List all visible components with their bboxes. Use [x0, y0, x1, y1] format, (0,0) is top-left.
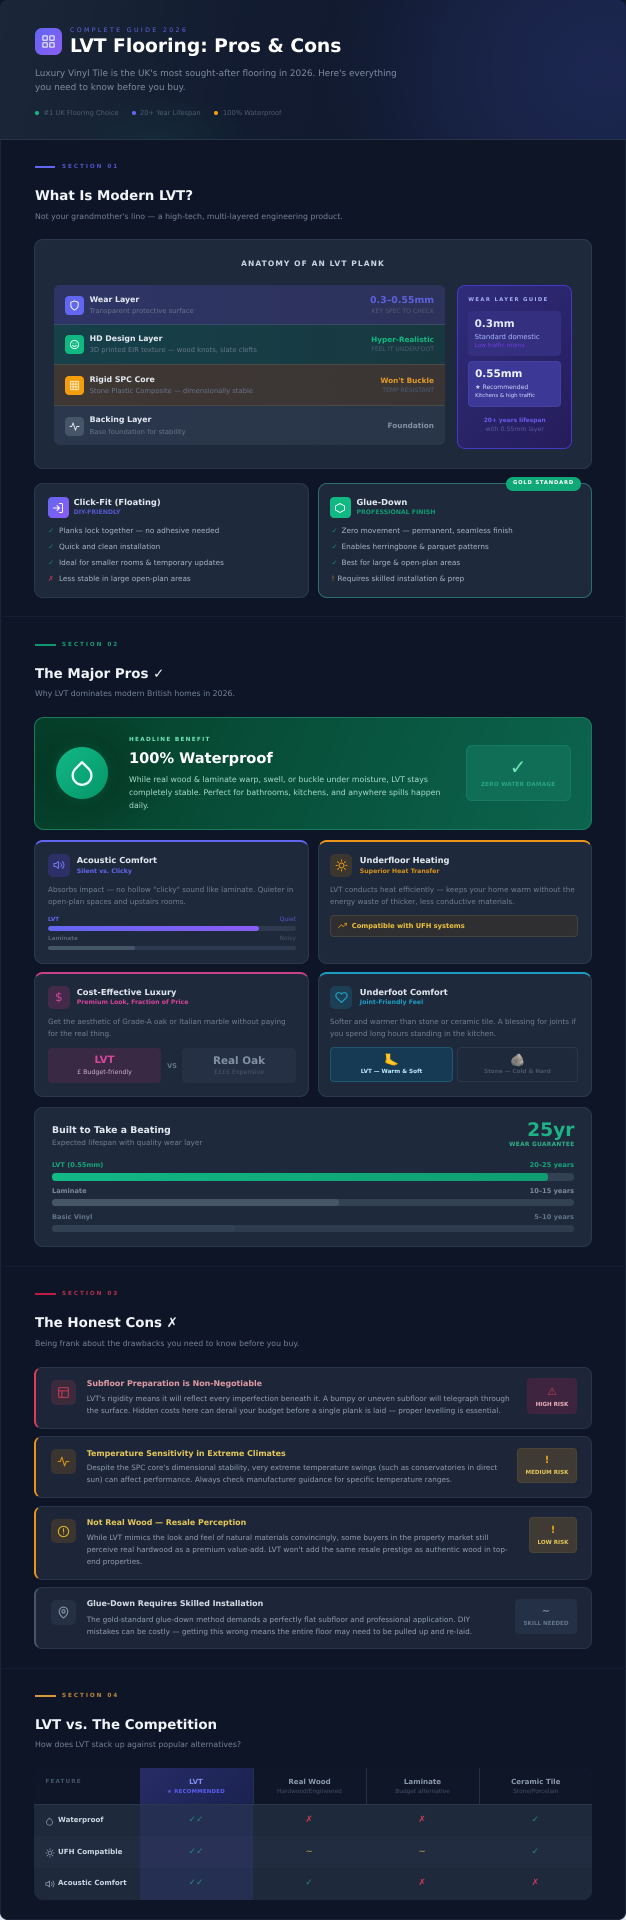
checklist: Best for large & open-plan areas	[342, 558, 460, 566]
table header: Ceramic Tile	[511, 1777, 560, 1786]
section 01 heading	[35, 164, 343, 221]
badge: medium risk: !	[545, 1455, 549, 1466]
callout: zero water damage: ZERO WATER DAMAGE	[481, 782, 555, 788]
table header: Stone/Porcelain	[513, 1789, 558, 1795]
table header: ★ RECOMMENDED	[167, 1789, 225, 1795]
compare: LVT price: LVT	[95, 1055, 114, 1066]
card: cost-effective luxury: Premium Look, Fraction of Price	[77, 999, 188, 1006]
bar: basic vinyl: 5–10 years	[534, 1213, 574, 1221]
badge: skill needed: SKILL NEEDED	[524, 1621, 568, 1627]
checklist: Less stable in large open-plan areas	[59, 574, 191, 582]
layer: HD design: FEEL IT UNDERFOOT	[371, 346, 434, 353]
tagline: Luxury Vinyl Tile is the UK's most sought-after flooring in 2026. Here's everything you need to know before you buy.	[35, 69, 397, 93]
row: waterproof: ✓✓	[189, 1815, 203, 1825]
panel: lifespan chart: Expected lifespan with quality wear layer	[52, 1138, 202, 1147]
section 02 heading	[35, 642, 235, 698]
table header: Real Wood	[288, 1777, 331, 1786]
row: acoustic comfort: ✓✓	[189, 1878, 203, 1888]
badge: high risk	[527, 1378, 577, 1414]
con: not real wood: While LVT mimics the look and feel of natural materials convincingly, some buyers in the property market still perceive real hardwood as a premium value-add. LVT won't add the same resale prestige as authentic wood in top- end properties.	[87, 1533, 508, 1566]
card: underfloor heating	[318, 840, 592, 964]
wear layer guide: with 0.55mm layer	[485, 426, 544, 432]
card: underfoot comfort: Underfoot Comfort	[360, 987, 448, 997]
layer: rigid SPC core	[54, 364, 445, 406]
card: acoustic comfort: Silent vs. Clicky	[77, 868, 132, 874]
row: acoustic comfort: ✗	[418, 1878, 426, 1888]
stat: 25yr: 25yr	[527, 1120, 574, 1141]
badge: skill needed	[515, 1599, 577, 1634]
row: acoustic comfort: ✓	[305, 1878, 313, 1888]
card: underfoot comfort: Joint-Friendly Feel	[360, 999, 423, 1006]
tag row: #1 UK Flooring Choice	[44, 109, 119, 117]
card: underfloor heating: Superior Heat Transfer	[360, 868, 439, 874]
layer: wear: KEY SPEC TO CHECK	[371, 308, 434, 315]
hero body text: While real wood & laminate warp, swell, or buckle under moisture, LVT stays completely stable. Perfect for bathrooms, kitchens, and anywhere spills happen daily.	[129, 775, 440, 810]
icon: grid logo	[35, 28, 62, 55]
layer: HD design: Hyper-Realistic	[371, 335, 434, 344]
row: waterproof: ✗	[418, 1815, 426, 1825]
row: waterproof	[34, 1805, 592, 1836]
section 02 heading: SECTION 02	[62, 642, 119, 648]
badge: high risk: ⚠	[547, 1385, 557, 1398]
checklist: ✓	[48, 542, 54, 551]
compare: LVT price	[48, 1048, 161, 1083]
bar: basic vinyl: Basic Vinyl	[52, 1213, 92, 1221]
badge: gold standard	[506, 477, 581, 491]
checklist: Requires skilled installation & prep	[338, 574, 464, 582]
hero: 100% waterproof: 100% Waterproof	[129, 750, 273, 767]
guide option: 0.3mm: 0.3mm	[475, 318, 515, 330]
card: glue-down: PROFESSIONAL FINISH	[356, 509, 435, 516]
layer: rigid SPC core: Stone Plastic Composite — dimensionally stable	[90, 387, 253, 395]
callout: zero water damage: ✓	[510, 755, 526, 779]
con: skilled installation	[34, 1587, 592, 1649]
wear layer guide: WEAR LAYER GUIDE	[468, 297, 549, 303]
con: temperature sensitivity: Temperature Sensitivity in Extreme Climates	[87, 1449, 286, 1458]
layer: backing: Foundation	[388, 421, 434, 430]
layer stack	[54, 285, 445, 445]
card: cost-effective luxury: Get the aesthetic of Grade-A oak or Italian marble without paying for the real thing.	[48, 1017, 286, 1038]
section 03 heading: Being frank about the drawbacks you need to know before you buy.	[35, 1338, 299, 1348]
bar: laminate noisy	[48, 935, 296, 950]
section 01 heading: SECTION 01	[62, 164, 119, 170]
table header: Budget alternative	[395, 1789, 450, 1795]
compare: stone cold: Stone — Cold & Hard	[484, 1069, 551, 1075]
checklist: ✓	[48, 558, 54, 566]
row: UFH compatible	[34, 1836, 592, 1868]
section 04 heading: How does LVT stack up against popular alternatives?	[35, 1740, 241, 1749]
wear layer guide	[457, 285, 572, 449]
section 03 heading: SECTION 03	[62, 1291, 119, 1297]
icon: speaker	[48, 854, 70, 877]
bar: laminate: Laminate	[52, 1187, 87, 1195]
row: acoustic comfort: ✗	[532, 1878, 539, 1888]
checklist: ✓	[332, 542, 338, 551]
bar: LVT quiet	[48, 916, 296, 931]
icon: heart	[330, 986, 352, 1009]
section 02 heading: Why LVT dominates modern British homes in 2026.	[35, 689, 235, 698]
badge: low risk: !	[551, 1525, 555, 1536]
row: waterproof: ✗	[305, 1815, 313, 1825]
con: not real wood: Not Real Wood — Resale Perception	[87, 1518, 246, 1527]
compare: LVT warm	[330, 1047, 453, 1082]
con: skilled installation: The gold-standard glue-down method demands a perfectly flat subfloor and professional application. DIY mistakes can be costly — getting this wrong means the entire floor may need to be pulled up and re-laid.	[87, 1614, 472, 1636]
card: underfloor heating: LVT conducts heat efficiently — keeps your home warm without the energy waste of thicker, less conductive materials.	[330, 885, 575, 906]
badge: low risk: LOW RISK	[538, 1540, 568, 1546]
layer: rigid SPC core: Rigid SPC Core	[90, 375, 155, 384]
checklist: ✓	[332, 526, 338, 535]
section 02 heading: The Major Pros ✓	[35, 667, 164, 682]
section 01 heading: What Is Modern LVT?	[35, 189, 193, 204]
panel title: ANATOMY OF AN LVT PLANK	[241, 259, 385, 268]
con: subfloor preparation	[34, 1367, 592, 1429]
checklist	[332, 526, 513, 582]
card: glue-down	[318, 483, 592, 598]
panel: anatomy of an LVT plank	[34, 239, 592, 469]
icon: sun	[330, 854, 352, 877]
badge: gold standard: GOLD STANDARD	[513, 480, 574, 486]
row: UFH compatible: ✓	[532, 1847, 539, 1857]
hero: 100% waterproof	[34, 717, 592, 830]
section 03 heading	[35, 1290, 299, 1348]
icon: alert circle	[51, 1519, 76, 1543]
card: cost-effective luxury: Cost-Effective Luxury	[77, 987, 176, 997]
table header	[34, 1768, 592, 1805]
icon: layout	[51, 1380, 76, 1405]
layer: HD design: HD Design Layer	[90, 334, 162, 343]
row: UFH compatible: UFH Compatible	[58, 1847, 122, 1856]
icon: dollar: $	[55, 990, 63, 1004]
card: acoustic comfort: Absorbs impact — no hollow "clicky" sound like laminate. Quieter in open-plan spaces and upstairs rooms.	[48, 885, 294, 906]
section 01 heading: Not your grandmother's lino — a high-tech, multi-layered engineering product.	[35, 212, 343, 220]
table header: Laminate	[404, 1777, 441, 1786]
panel: lifespan chart: Built to Take a Beating	[52, 1125, 171, 1136]
icon: dollar	[48, 986, 70, 1009]
row: acoustic comfort: Acoustic Comfort	[58, 1878, 127, 1887]
header	[0, 0, 626, 140]
table header: FEATURE	[46, 1779, 82, 1785]
checklist: Enables herringbone & parquet patterns	[342, 542, 489, 551]
icon: hexagon	[330, 497, 350, 518]
guide option: 0.3mm	[468, 311, 561, 356]
callout: UFH compatible: Compatible with UFH systems	[352, 922, 465, 930]
row: waterproof: ✓	[532, 1815, 539, 1825]
con: not real wood	[34, 1506, 592, 1580]
tag row: 20+ Year Lifespan	[140, 109, 201, 117]
checklist: Quick and clean installation	[59, 542, 160, 551]
con: temperature sensitivity	[34, 1436, 592, 1498]
con: subfloor preparation: Subfloor Preparation is Non-Negotiable	[87, 1379, 262, 1388]
checklist: Zero movement — permanent, seamless finish	[342, 526, 513, 535]
compare: real oak price: ££££ Expensive	[214, 1069, 264, 1076]
bar: LVT: LVT (0.55mm)	[52, 1161, 103, 1169]
row: waterproof: Waterproof	[58, 1815, 103, 1824]
card: underfloor heating: Underfloor Heating	[360, 855, 449, 865]
guide option: 0.55mm: 0.55mm	[475, 368, 522, 380]
hero: 100% waterproof: HEADLINE BENEFIT	[129, 736, 211, 742]
card: cost-effective luxury: VS	[167, 1062, 177, 1070]
row: UFH compatible: ~	[305, 1847, 313, 1857]
layer: backing: Backing Layer	[90, 415, 151, 424]
row: UFH compatible: ✓✓	[189, 1847, 203, 1857]
bar: LVT quiet: Quiet	[280, 916, 296, 922]
card: click-fit	[34, 483, 309, 598]
layer: backing	[54, 406, 445, 445]
guide option: 0.3mm: Low traffic rooms	[475, 343, 525, 349]
card: underfoot comfort	[318, 972, 592, 1096]
layer: rigid SPC core: Won't Buckle	[380, 376, 434, 385]
con: subfloor preparation: LVT's rigidity means it will reflect every imperfection beneath it. A bumpy or uneven subfloor will telegraph through the surface. Hidden costs here can derail your budget before a single plank is laid — proper levelling is essential.	[87, 1394, 510, 1415]
bar: LVT quiet: LVT	[48, 916, 59, 922]
guide option: 0.3mm: Standard domestic	[475, 333, 540, 341]
icon: map pin	[51, 1600, 76, 1625]
wear layer guide: 20+ years lifespan	[484, 418, 546, 424]
card: underfoot comfort: Softer and warmer than stone or ceramic tile. A blessing for joints if you spend long hours standing in the kitchen.	[330, 1017, 576, 1038]
bar: basic vinyl	[52, 1213, 574, 1232]
checklist: ✓	[48, 526, 54, 535]
tag row: 100% Waterproof	[223, 109, 281, 117]
section 04 heading: LVT vs. The Competition	[35, 1718, 217, 1733]
section 03 heading: The Honest Cons ✗	[35, 1316, 178, 1331]
card: click-fit: Click-Fit (Floating)	[74, 497, 161, 507]
con: skilled installation: Glue-Down Requires Skilled Installation	[87, 1599, 263, 1608]
layer: rigid SPC core: TEMP RESISTANT	[382, 387, 434, 394]
row: UFH compatible: ~	[418, 1847, 426, 1857]
layer: HD design: 3D printed EIR texture — wood knots, slate clefts	[90, 346, 257, 354]
table header: LVT	[189, 1778, 203, 1786]
compare: LVT warm: 🦶	[384, 1053, 399, 1067]
eyebrow: COMPLETE GUIDE 2026	[70, 27, 188, 34]
tag row	[35, 109, 282, 117]
bar: LVT: 20–25 years	[530, 1161, 574, 1169]
card: glue-down: Glue-Down	[356, 497, 407, 507]
badge: high risk: HIGH RISK	[536, 1402, 568, 1408]
guide option: 0.55mm: ★ Recommended	[475, 384, 528, 390]
checklist: ✓	[332, 558, 338, 566]
checklist: ✗	[48, 574, 54, 582]
title: LVT Flooring: Pros & Cons	[70, 36, 341, 57]
layer: wear	[54, 285, 445, 325]
callout: zero water damage	[466, 745, 571, 801]
stat: 25yr	[509, 1120, 574, 1148]
table header: Hardwood/Engineered	[277, 1789, 342, 1795]
guide option: 0.55mm: Kitchens & high traffic	[475, 393, 535, 399]
stat: 25yr: WEAR GUARANTEE	[509, 1142, 574, 1148]
panel: lifespan chart	[34, 1107, 592, 1247]
checklist: Planks lock together — no adhesive needed	[59, 526, 219, 535]
card: acoustic comfort	[34, 840, 309, 964]
comparison table	[34, 1768, 592, 1900]
badge: skill needed: ~	[542, 1606, 550, 1617]
compare: LVT warm: LVT — Warm & Soft	[361, 1069, 422, 1075]
section 04 heading: SECTION 04	[62, 1693, 119, 1699]
card: acoustic comfort: Acoustic Comfort	[77, 855, 157, 865]
section 04 heading	[35, 1692, 241, 1749]
bar: laminate noisy: Noisy	[279, 935, 296, 942]
card: click-fit: DIY-FRIENDLY	[74, 509, 120, 516]
icon: pulse	[51, 1449, 76, 1474]
layer: HD design	[54, 325, 445, 364]
badge: medium risk	[517, 1448, 577, 1483]
checklist: !	[332, 574, 334, 582]
badge: medium risk: MEDIUM RISK	[526, 1470, 568, 1476]
guide option: 0.55mm	[468, 361, 561, 407]
layer: wear: Transparent protective surface	[90, 307, 194, 315]
card: cost-effective luxury	[34, 972, 309, 1096]
layer: wear: 0.3–0.55mm	[370, 295, 434, 306]
compare: stone cold	[457, 1047, 578, 1082]
bar: LVT	[52, 1161, 574, 1181]
compare: LVT price: £ Budget-friendly	[77, 1069, 132, 1076]
compare: stone cold: 🪨	[510, 1053, 525, 1067]
compare: real oak price: Real Oak	[213, 1055, 265, 1067]
bar: laminate	[52, 1187, 574, 1206]
callout: UFH compatible	[330, 915, 578, 937]
compare: real oak price	[182, 1048, 296, 1083]
con: temperature sensitivity: Despite the SPC core's dimensional stability, very extreme temperature swings (such as conservatories in direct sun) can affect performance. Always check manufacturer guidance for specific temperature ranges.	[87, 1463, 497, 1484]
checklist	[48, 526, 224, 582]
layer: backing: Base foundation for stability	[90, 428, 186, 436]
bar: laminate noisy: Laminate	[48, 936, 78, 942]
bar: laminate: 10–15 years	[530, 1187, 574, 1195]
icon: login arrow	[48, 497, 68, 518]
checklist: Ideal for smaller rooms & temporary updates	[59, 558, 224, 566]
row: acoustic comfort	[34, 1868, 592, 1900]
icon: water drop	[56, 747, 108, 799]
badge: low risk	[529, 1517, 577, 1553]
layer: wear: Wear Layer	[90, 295, 139, 304]
